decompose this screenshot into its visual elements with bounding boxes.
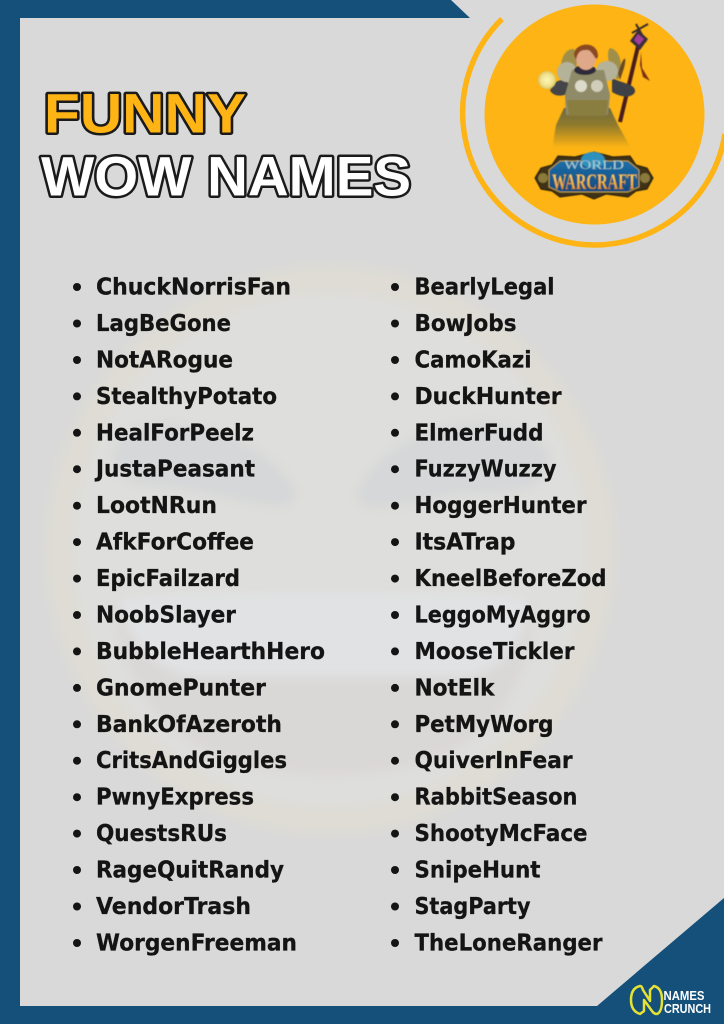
decorative ring arc: [463, 19, 724, 245]
brand word: crunch: CRUNCH: [664, 1001, 711, 1016]
names list: left column: NotARogue: [96, 346, 233, 374]
names list: left column: HealForPeelz: [96, 418, 254, 446]
names list: right column: FuzzyWuzzy: [414, 455, 556, 483]
names list: right column: NotElk: [414, 673, 496, 701]
logo frame: [535, 152, 653, 199]
names list: left column: [73, 272, 325, 956]
names list: right column: KneelBeforeZod: [414, 564, 606, 592]
names list: right column: RabbitSeason: [414, 783, 578, 811]
wings: [561, 49, 577, 82]
names list: right column: BowJobs: [414, 309, 516, 337]
title: [41, 82, 411, 208]
names list: right column: PetMyWorg: [414, 710, 554, 738]
logo word: world: WORLD: [564, 157, 624, 172]
arms: [550, 80, 570, 96]
names list: left column: WorgenFreeman: [96, 928, 297, 956]
names list: right column: HoggerHunter: [414, 491, 587, 519]
names list: right column: QuiverInFear: [414, 746, 573, 774]
brand word: names: NAMES: [664, 988, 705, 1003]
title line: wow names: WOW NAMES: [41, 144, 411, 208]
smiley watermark: [45, 265, 615, 835]
names list: right column: [391, 272, 606, 956]
names list: left column: BankOfAzeroth: [96, 710, 282, 738]
names list: right column: ShootyMcFace: [414, 819, 588, 847]
names list: left column: LagBeGone: [96, 309, 231, 337]
names list: right column: ElmerFudd: [414, 418, 544, 446]
names list: left column: ChuckNorrisFan: [96, 272, 291, 300]
names list: right column: LeggoMyAggro: [414, 600, 590, 628]
names list: left column: LootNRun: [96, 491, 217, 519]
glowing hand: [538, 71, 556, 89]
names list: right column: TheLoneRanger: [414, 928, 603, 956]
collar: [574, 65, 596, 75]
logo word: warcraft: WARCRAFT: [552, 169, 637, 194]
head: [576, 46, 596, 70]
title line: funny: FUNNY: [44, 82, 246, 144]
logo: world of warcraft: [535, 152, 653, 199]
names list: left column: StealthyPotato: [96, 382, 277, 410]
shoulders: [557, 62, 577, 82]
icon: n mark: [631, 986, 662, 1014]
names list: right column: SnipeHunt: [414, 856, 540, 884]
names list: left column: CritsAndGiggles: [96, 746, 287, 774]
names list: left column: PwnyExpress: [96, 783, 254, 811]
names list: right column: DuckHunter: [414, 382, 562, 410]
staff: [620, 24, 650, 122]
names list: left column: GnomePunter: [96, 673, 266, 701]
robe: [552, 108, 632, 150]
names list: right column: MooseTickler: [414, 637, 575, 665]
names list: left column: EpicFailzard: [96, 564, 240, 592]
names list: left column: JustaPeasant: [94, 455, 255, 483]
names list: left column: VendorTrash: [96, 892, 251, 920]
brand logo: names crunch: [631, 986, 711, 1016]
names list: right column: CamoKazi: [414, 346, 532, 374]
torso armor: [565, 70, 610, 115]
names list: left column: BubbleHearthHero: [96, 637, 325, 665]
names list: right column: BearlyLegal: [414, 272, 554, 300]
names list: right column: StagParty: [414, 892, 530, 920]
names list: left column: AfkForCoffee: [96, 528, 254, 556]
names list: left column: RageQuitRandy: [96, 856, 284, 884]
names list: left column: NoobSlayer: [96, 600, 236, 628]
icon: armored character: [538, 24, 650, 150]
names list: right column: ItsATrap: [414, 528, 516, 556]
names list: left column: QuestsRUs: [96, 819, 227, 847]
yellow circle: [484, 4, 704, 224]
